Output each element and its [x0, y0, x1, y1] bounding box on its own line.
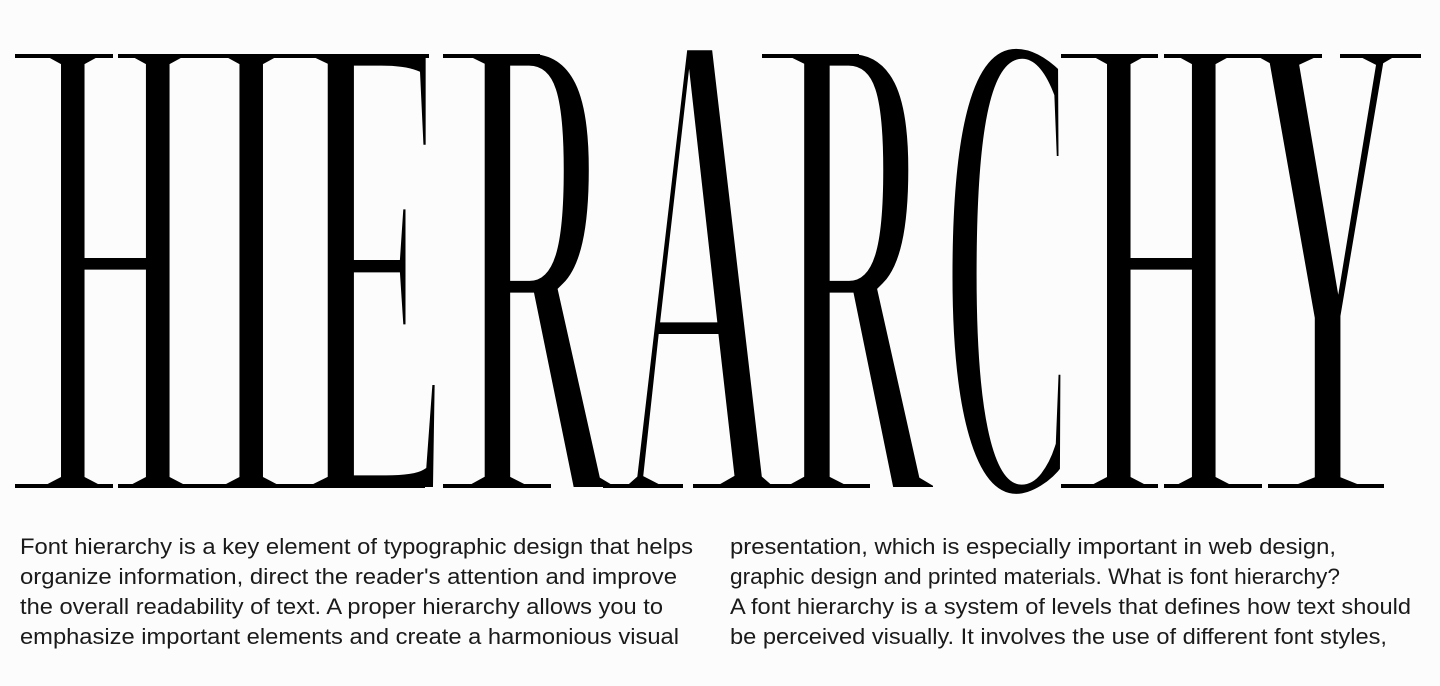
- body text: [20, 534, 1411, 649]
- left text column: [20, 534, 693, 649]
- right text column: presentation, which is especially important in web design,: [730, 534, 1336, 559]
- right text column: [730, 534, 1411, 649]
- left text column: organize information, direct the reader's attention and improve: [20, 564, 677, 589]
- left text column: Font hierarchy is a key element of typographic design that helps: [20, 534, 693, 559]
- left text column: emphasize important elements and create a harmonious visual: [20, 624, 679, 649]
- right text column: graphic design and printed materials. What is font hierarchy?: [730, 564, 1340, 589]
- right text column: A font hierarchy is a system of levels that defines how text should: [730, 594, 1411, 619]
- right text column: be perceived visually. It involves the use of different font styles,: [730, 624, 1387, 649]
- title: [15, 0, 1421, 510]
- left text column: the overall readability of text. A proper hierarchy allows you to: [20, 594, 663, 619]
